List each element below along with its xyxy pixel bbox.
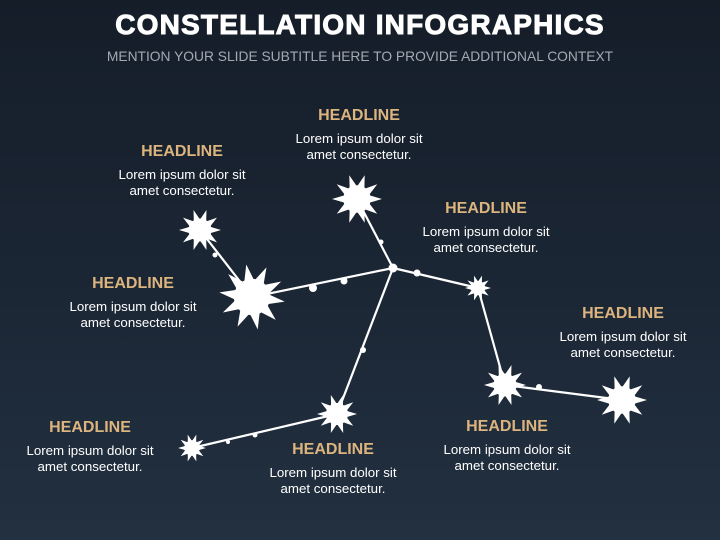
text 7: Lorem ipsum dolor sit [269, 465, 397, 480]
star A [179, 210, 221, 250]
text 3: Lorem ipsum dolor sit [422, 224, 550, 239]
star C [332, 175, 382, 223]
text 6 [26, 419, 154, 474]
star H [178, 435, 206, 461]
text 3: amet consectetur. [434, 240, 538, 255]
star E [484, 365, 526, 405]
text 4 [69, 275, 197, 330]
text 6: HEADLINE [49, 419, 131, 436]
text 6: amet consectetur. [38, 459, 142, 474]
text 5: amet consectetur. [571, 345, 675, 360]
text 4: amet consectetur. [81, 315, 185, 330]
title: CONSTELLATION INFOGRAPHICS [115, 9, 605, 40]
text 8: HEADLINE [466, 418, 548, 435]
text 2: Lorem ipsum dolor sit [295, 131, 423, 146]
text 4: Lorem ipsum dolor sit [69, 299, 197, 314]
star G [317, 395, 357, 433]
text 1: amet consectetur. [130, 183, 234, 198]
text 7 [269, 441, 397, 496]
star D [465, 276, 491, 300]
text 5 [559, 305, 687, 360]
text 1: HEADLINE [141, 143, 223, 160]
text 1: Lorem ipsum dolor sit [118, 167, 246, 182]
text 5: Lorem ipsum dolor sit [559, 329, 687, 344]
text 1 [118, 143, 246, 198]
text 6: Lorem ipsum dolor sit [26, 443, 154, 458]
text 8: amet consectetur. [455, 458, 559, 473]
star B [215, 261, 289, 333]
text 2 [295, 107, 423, 162]
text 5: HEADLINE [582, 305, 664, 322]
text 3 [422, 200, 550, 255]
text 2: HEADLINE [318, 107, 400, 124]
text 2: amet consectetur. [307, 147, 411, 162]
subtitle: MENTION YOUR SLIDE SUBTITLE HERE TO PROVIDE ADDITIONAL CONTEXT [107, 49, 613, 64]
text 7: amet consectetur. [281, 481, 385, 496]
text 7: HEADLINE [292, 441, 374, 458]
text 3: HEADLINE [445, 200, 527, 217]
text 8: Lorem ipsum dolor sit [443, 442, 571, 457]
text 4: HEADLINE [92, 275, 174, 292]
text 8 [443, 418, 571, 473]
star F [597, 376, 647, 424]
